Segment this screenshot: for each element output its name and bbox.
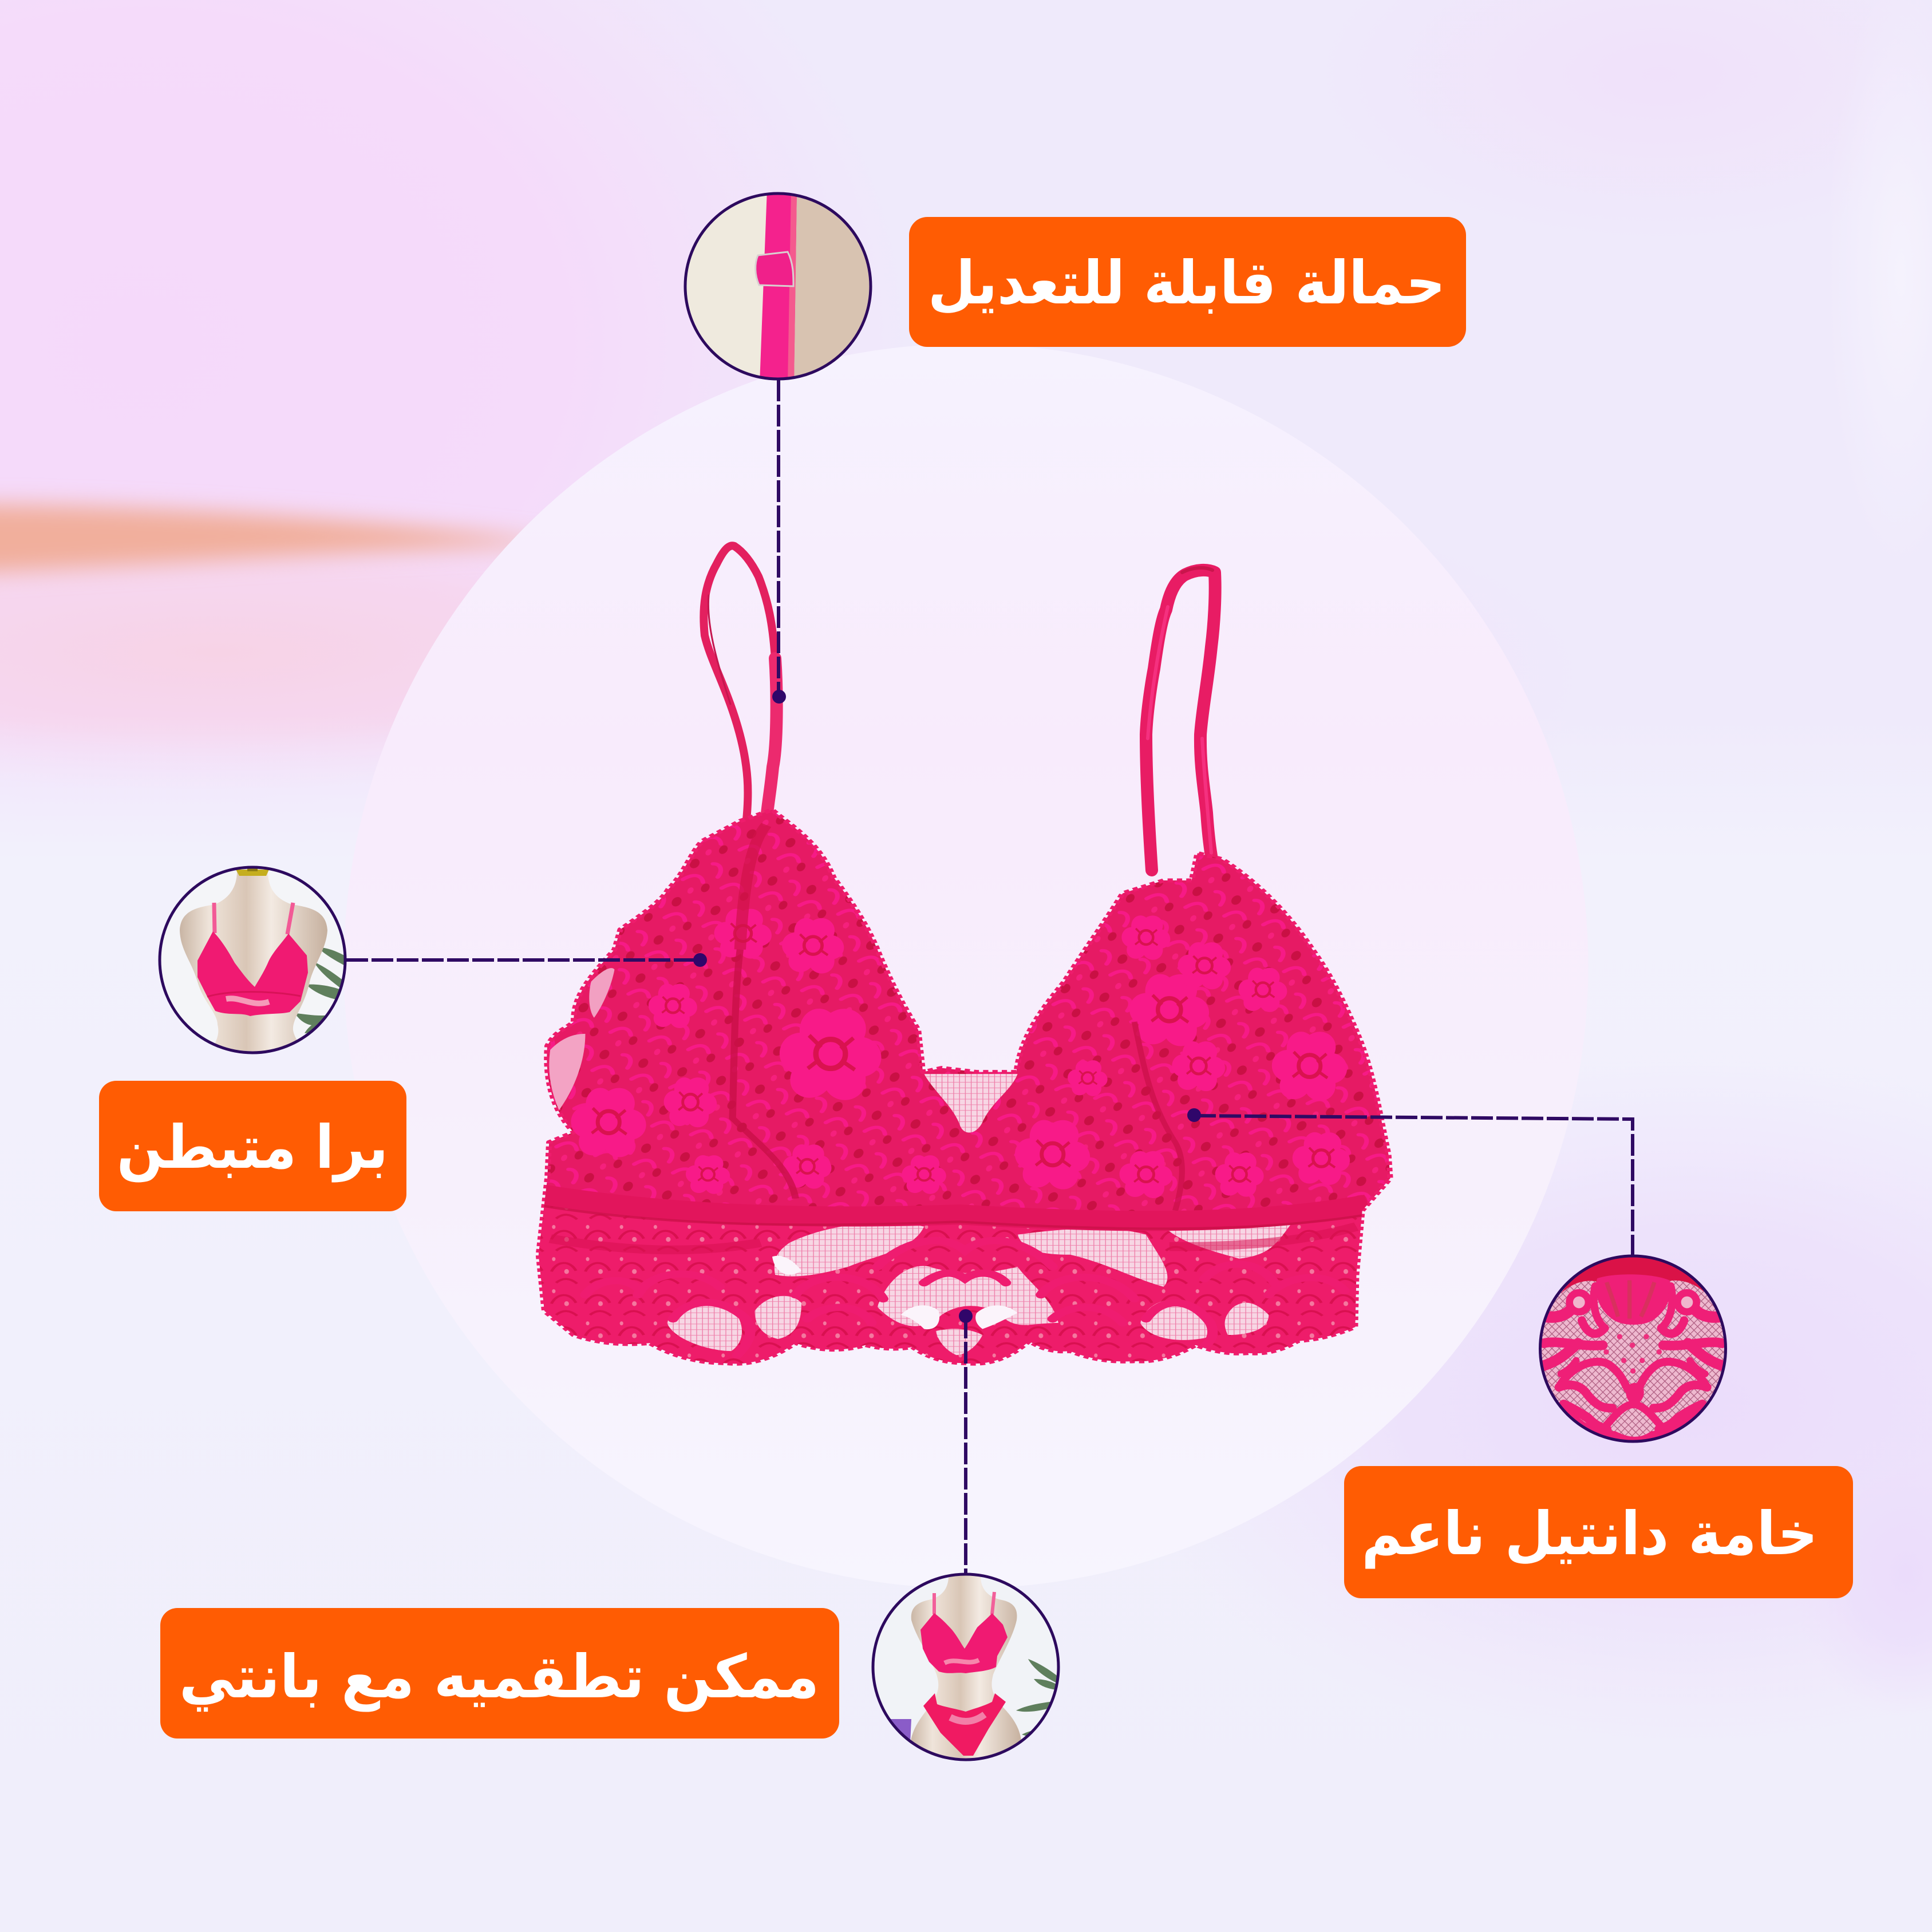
label: can match with panty: ممكن تطقميه مع بانتي: [179, 1642, 819, 1712]
mini bra: [920, 1613, 1008, 1673]
plant leaves: [1016, 1659, 1059, 1737]
centre knot: [1626, 1383, 1644, 1404]
mannequin body: [910, 1574, 1022, 1760]
callout connector: matching panty: [959, 1309, 973, 1574]
plant leaves: [295, 947, 350, 1033]
bra product photo: [515, 546, 1392, 1375]
large pale backdrop circle: [343, 343, 1588, 1588]
callout connector: adjustable strap: [772, 380, 786, 704]
right shoulder strap: [1146, 568, 1215, 870]
right half motifs: [1638, 1286, 1724, 1429]
dark lace top edge: [1561, 1254, 1704, 1294]
label: can match with panty: [160, 1608, 839, 1739]
white cut-outs in band: [772, 1256, 801, 1275]
gold neck cap: [236, 870, 269, 876]
band fan motifs: [585, 1240, 1345, 1355]
purple cloth: [887, 1719, 911, 1743]
label: adjustable strap: حمالة قابلة للتعديل: [928, 248, 1445, 318]
label: soft lace material: [1344, 1466, 1853, 1598]
mannequin torso: [180, 871, 327, 1052]
centre dots: [1603, 1334, 1662, 1374]
inset: matching set on mannequin: [873, 1574, 1059, 1760]
underband base: [538, 1195, 1367, 1364]
callout connector: lace material: [1187, 1108, 1633, 1257]
label: padded bra: [99, 1081, 406, 1211]
label: adjustable strap: [909, 217, 1466, 347]
cup fold shadows: [733, 950, 796, 1199]
strap slider: [756, 252, 793, 286]
lace cups and underband: [515, 810, 1392, 1375]
inset: bra on mannequin: [160, 867, 350, 1053]
central fan motif: [1596, 1274, 1671, 1325]
mini panty: [923, 1693, 1006, 1756]
callout connector: padded bra: [346, 953, 707, 967]
inset: lace fabric close-up: [1540, 1254, 1726, 1442]
label: padded bra: برا متبطن: [117, 1112, 388, 1182]
inset: strap adjuster close-up: [681, 189, 876, 384]
sheer edges on left cup: [549, 1034, 585, 1110]
label: soft lace material: خامة دانتيل ناعم: [1361, 1499, 1818, 1569]
left half motifs: [1542, 1286, 1627, 1429]
sheer band panels: [775, 1223, 924, 1277]
cup flowers: [780, 1009, 882, 1100]
straps: [934, 1592, 994, 1614]
centre gore sheer panel: [924, 1074, 1018, 1133]
straps: [214, 903, 293, 934]
band seam: [542, 1195, 1368, 1221]
mini bra: [197, 931, 308, 1016]
lower scalloped edge: [1564, 1404, 1704, 1441]
left shoulder strap: [704, 546, 777, 820]
